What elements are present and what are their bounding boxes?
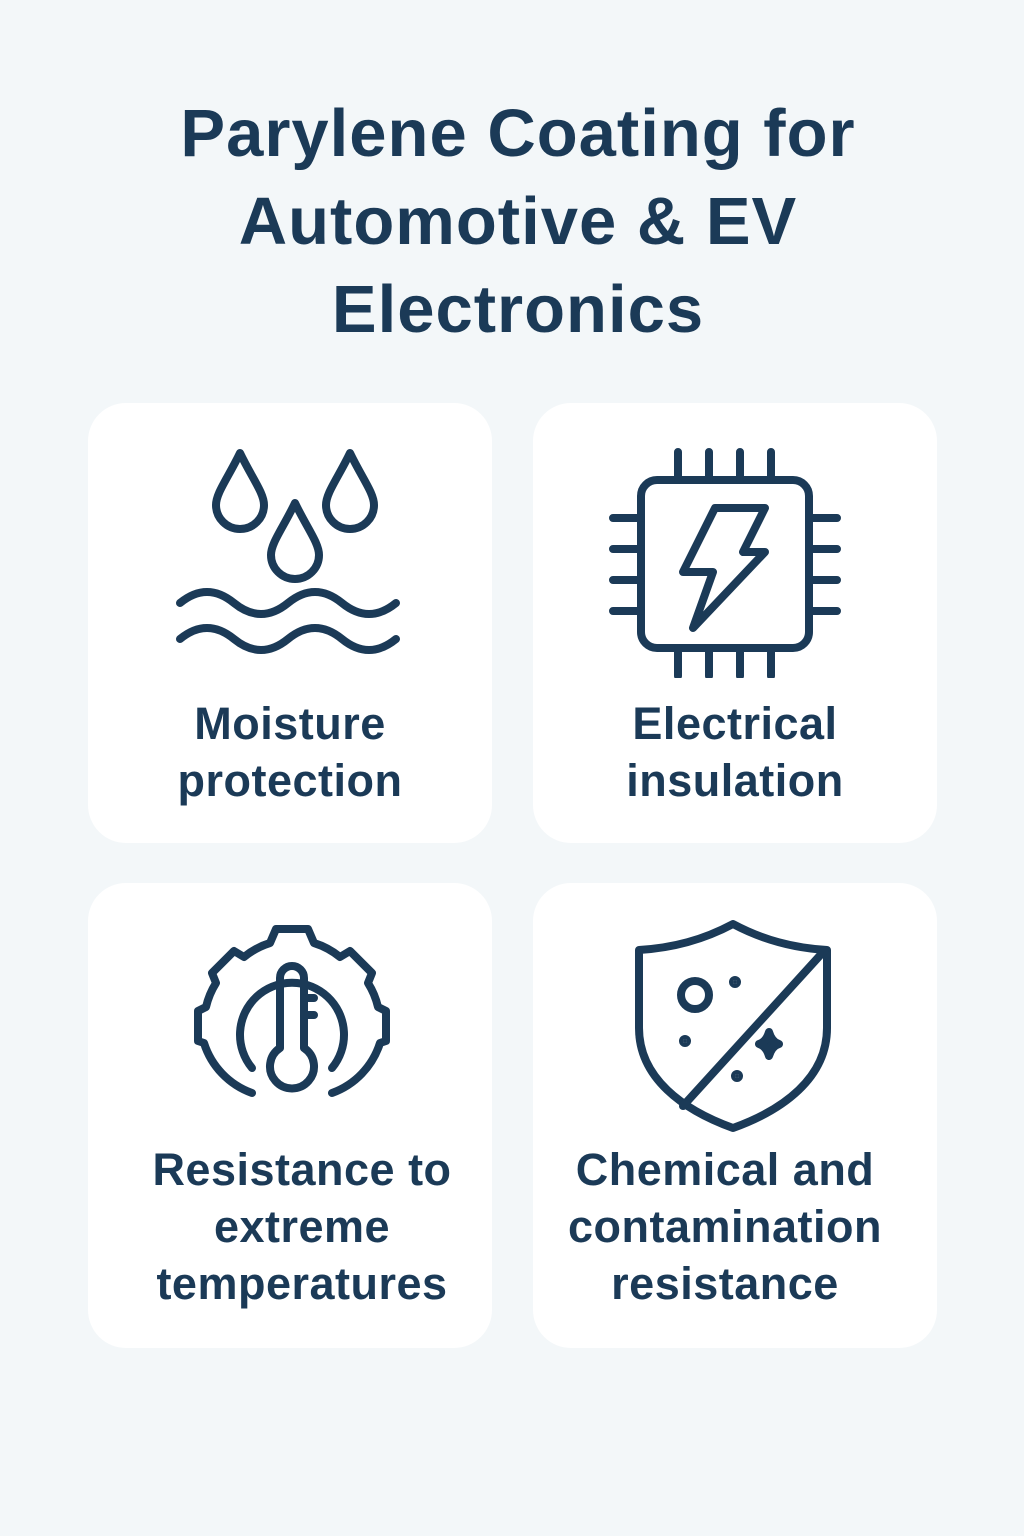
title bbox=[180, 96, 856, 347]
icon: shield bbox=[635, 920, 831, 1132]
title: Automotive & EV bbox=[239, 184, 797, 259]
title: Electronics bbox=[332, 272, 704, 347]
label: Chemical and bbox=[576, 1144, 874, 1195]
label: temperatures bbox=[156, 1258, 448, 1309]
icon: chip with bolt bbox=[609, 448, 841, 678]
label: Moisture bbox=[194, 698, 386, 749]
panel: moisture bbox=[88, 403, 492, 843]
panel: electrical bbox=[533, 403, 937, 843]
label bbox=[626, 698, 844, 806]
panel: chemical bbox=[533, 883, 937, 1348]
label: Resistance to bbox=[152, 1144, 452, 1195]
label: protection bbox=[178, 755, 402, 806]
label: resistance bbox=[611, 1258, 839, 1309]
label: extreme bbox=[214, 1201, 390, 1252]
icon: gear with thermometer bbox=[194, 925, 390, 1097]
label bbox=[568, 1144, 882, 1309]
label bbox=[178, 698, 402, 806]
icon: water drops and waves bbox=[176, 449, 400, 654]
label bbox=[152, 1144, 452, 1309]
title: Parylene Coating for bbox=[180, 96, 856, 171]
label: contamination bbox=[568, 1201, 882, 1252]
panel: temperature bbox=[88, 883, 492, 1348]
label: insulation bbox=[626, 755, 844, 806]
label: Electrical bbox=[632, 698, 838, 749]
